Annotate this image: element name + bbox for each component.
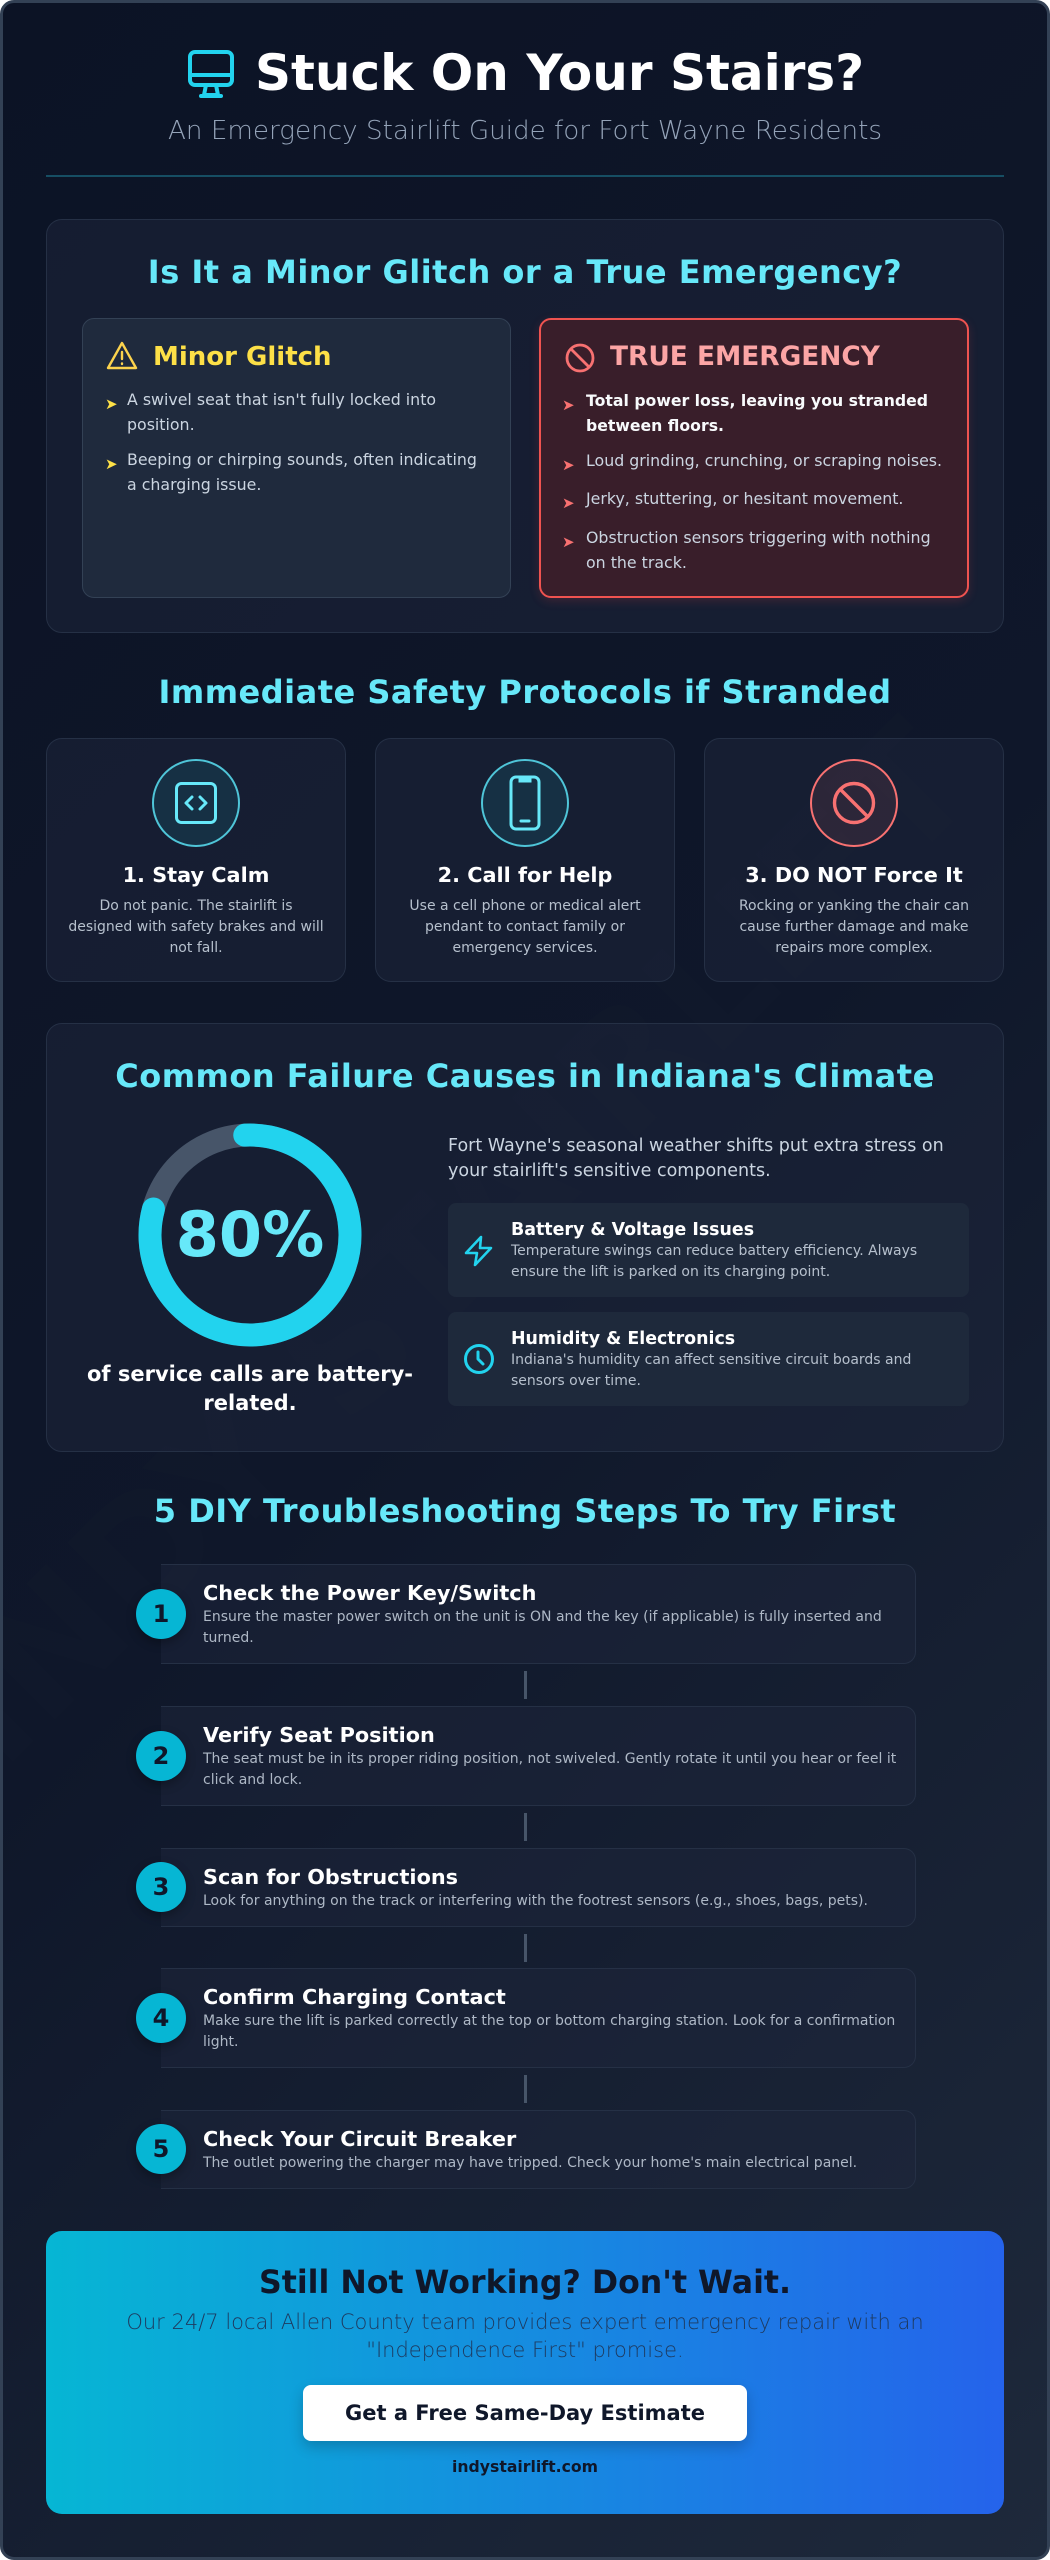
step 2 number — [136, 1731, 186, 1781]
icon: ban circle — [810, 759, 898, 847]
step 5 number — [136, 2124, 186, 2174]
step 4 title: Confirm Charging Contact — [203, 1985, 506, 2009]
intro text: Fort Wayne's seasonal weather shifts put extra stress on — [448, 1136, 944, 1156]
icon: warning — [106, 342, 138, 370]
step 1 title: Check the Power Key/Switch — [203, 1581, 536, 1605]
stay calm text: Do not panic. The stairlift is — [99, 898, 293, 914]
minor glitch title: Minor Glitch — [153, 342, 332, 372]
emergency list: between floors. — [586, 416, 724, 434]
call for help text — [409, 898, 641, 956]
minor list: position. — [127, 414, 195, 434]
step 1 text: turned. — [203, 1630, 254, 1646]
step 4 text: Make sure the lift is parked correctly at the top or bottom charging station. Look for a confirmation — [203, 2013, 895, 2029]
cta text — [126, 2310, 924, 2362]
title: Stuck On Your Stairs? — [255, 44, 864, 102]
step 1 — [136, 1564, 916, 1664]
panel: call to action — [46, 2231, 1004, 2514]
step 1 text — [203, 1609, 882, 1646]
card: true emergency — [539, 318, 969, 598]
step 2 text: The seat must be in its proper riding position, not swiveled. Gently rotate it until you hear or feel it — [203, 1751, 896, 1767]
call for help text: pendant to contact family or — [425, 919, 625, 935]
battery title: Battery & Voltage Issues — [511, 1220, 754, 1240]
emergency title: TRUE EMERGENCY — [610, 341, 880, 372]
emergency list: on the track. — [586, 552, 687, 572]
icon: clock — [464, 1344, 494, 1374]
panel: failure causes — [46, 1023, 1004, 1452]
step 1 text: Ensure the master power switch on the unit is ON and the key (if applicable) is fully inserted and — [203, 1609, 882, 1625]
header — [168, 44, 882, 146]
step 5 number: 5 — [153, 2135, 169, 2163]
box: battery — [448, 1203, 969, 1297]
minor list: ➤ — [105, 395, 118, 413]
step 2 — [136, 1706, 916, 1806]
step 2 number: 2 — [153, 1742, 169, 1770]
minor list: a charging issue. — [127, 474, 261, 494]
step 4 number: 4 — [153, 2004, 169, 2032]
website: indystairlift.com — [452, 2457, 598, 2476]
heading: minor or emergency: Is It a Minor Glitch or a True Emergency? — [148, 253, 902, 291]
call for help title: 2. Call for Help — [438, 863, 612, 887]
emergency list: Loud grinding, crunching, or scraping noises. — [586, 451, 942, 470]
card: stay calm — [46, 738, 346, 982]
heading: failure causes: Common Failure Causes in Indiana's Climate — [115, 1057, 935, 1095]
humidity title: Humidity & Electronics — [511, 1329, 735, 1349]
force title: 3. DO NOT Force It — [745, 863, 963, 887]
heading: diy steps: 5 DIY Troubleshooting Steps To Try First — [154, 1492, 896, 1530]
battery text: ensure the lift is parked on its charging point. — [511, 1264, 830, 1280]
step 1 number: 1 — [153, 1600, 169, 1628]
donut chart — [138, 1124, 362, 1346]
subtitle: An Emergency Stairlift Guide for Fort Wayne Residents — [168, 116, 882, 146]
step 3 title: Scan for Obstructions — [203, 1865, 458, 1889]
minor list: ➤ — [105, 455, 118, 473]
intro text — [448, 1136, 944, 1181]
force text: repairs more complex. — [775, 940, 933, 956]
stay calm text — [68, 898, 324, 956]
cta text: Our 24/7 local Allen County team provides expert emergency repair with an — [126, 2310, 924, 2334]
step 5 title: Check Your Circuit Breaker — [203, 2127, 516, 2151]
percentage: 80% — [176, 1198, 324, 1271]
icon: monitor — [188, 50, 234, 98]
step 3 text: Look for anything on the track or interfering with the footrest sensors (e.g., shoes, bags, pets). — [203, 1893, 868, 1909]
emergency list: Obstruction sensors triggering with nothing — [586, 528, 931, 547]
step 5 text: The outlet powering the charger may have tripped. Check your home's main electrical panel. — [203, 2155, 857, 2171]
stay calm text: not fall. — [169, 940, 223, 956]
box: humidity — [448, 1312, 969, 1406]
force text: cause further damage and make — [739, 919, 969, 935]
icon: bolt — [464, 1236, 492, 1266]
force text — [739, 898, 969, 956]
donut caption: related. — [203, 1391, 297, 1415]
humidity text: sensors over time. — [511, 1373, 641, 1389]
emergency list: ➤ — [562, 456, 575, 474]
step 2 title: Verify Seat Position — [203, 1723, 435, 1747]
step 4 text: light. — [203, 2034, 238, 2050]
step 1 number — [136, 1589, 186, 1639]
icon: phone — [481, 759, 569, 847]
call for help text: Use a cell phone or medical alert — [409, 898, 641, 914]
emergency list: ➤ — [562, 494, 575, 512]
cta heading: Still Not Working? Don't Wait. — [259, 2265, 791, 2301]
humidity text — [511, 1352, 911, 1389]
panel: minor glitch vs true emergency — [46, 219, 1004, 633]
donut caption — [87, 1362, 413, 1415]
intro text: your stairlift's sensitive components. — [448, 1161, 771, 1181]
cta text: "Independence First" promise. — [366, 2338, 684, 2362]
battery text: Temperature swings can reduce battery efficiency. Always — [511, 1243, 917, 1259]
humidity text: Indiana's humidity can affect sensitive circuit boards and — [511, 1352, 911, 1368]
stay calm text: designed with safety brakes and will — [68, 919, 324, 935]
minor list — [105, 390, 477, 494]
step 4 — [136, 1968, 916, 2068]
step 3 number: 3 — [153, 1873, 169, 1901]
emergency list: Total power loss, leaving you stranded — [586, 391, 928, 410]
donut caption: of service calls are battery- — [87, 1362, 413, 1386]
minor list: Beeping or chirping sounds, often indicating — [127, 450, 477, 469]
icon: circle tablet — [152, 759, 240, 847]
step 4 text — [203, 2013, 895, 2050]
step 3 number — [136, 1862, 186, 1912]
emergency list: Jerky, stuttering, or hesitant movement. — [586, 489, 903, 508]
call for help text: emergency services. — [452, 940, 598, 956]
step 5 — [136, 2110, 916, 2189]
icon: ban — [566, 344, 594, 372]
step 2 text: click and lock. — [203, 1772, 302, 1788]
card: call for help — [375, 738, 675, 982]
cta button — [303, 2385, 747, 2441]
step 3 — [136, 1848, 916, 1927]
card: minor glitch — [82, 318, 511, 598]
cta button: Get a Free Same-Day Estimate — [345, 2401, 705, 2425]
minor list: A swivel seat that isn't fully locked into — [127, 390, 436, 409]
card: do not force — [704, 738, 1004, 982]
emergency list — [562, 391, 942, 572]
battery text — [510, 1243, 917, 1280]
step 4 number — [136, 1993, 186, 2043]
force text: Rocking or yanking the chair can — [739, 898, 969, 914]
step 2 text — [202, 1751, 896, 1788]
emergency list: ➤ — [562, 396, 575, 414]
emergency list: ➤ — [562, 533, 575, 551]
stay calm title: 1. Stay Calm — [123, 863, 269, 887]
heading: safety protocols: Immediate Safety Protocols if Stranded — [158, 673, 892, 711]
